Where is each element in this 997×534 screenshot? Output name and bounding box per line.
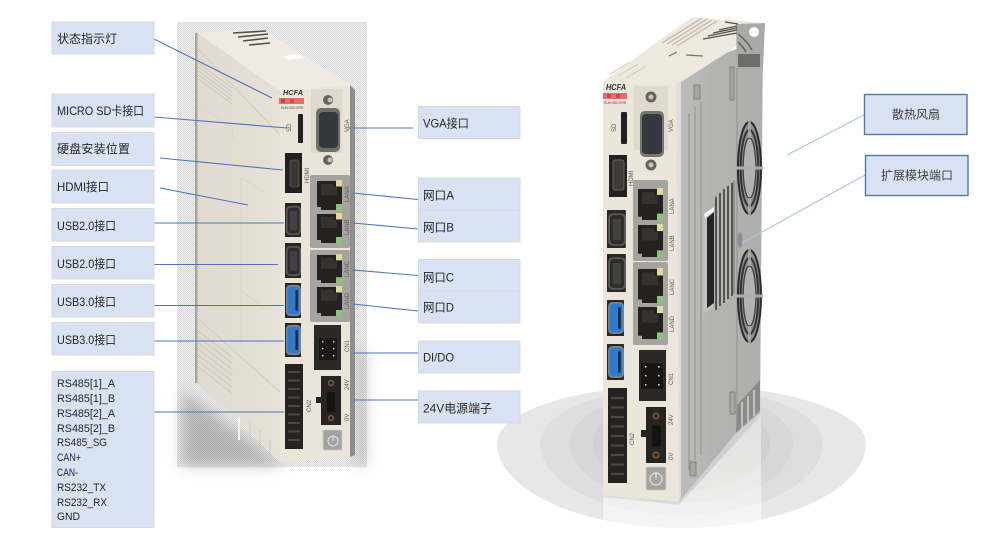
device: right controller photo [603, 17, 765, 502]
label: CN2 signal list: CAN+ [57, 452, 81, 464]
24V power terminal: 0V [345, 414, 351, 421]
LAN A and B: LANB [670, 235, 676, 251]
label: VGA: VGA接口 [423, 116, 469, 130]
SD slot [287, 114, 303, 143]
device: left controller photo [195, 29, 355, 462]
top grille [233, 31, 270, 45]
24V power terminal: 0V [669, 453, 675, 460]
label: CN2 signal list: RS485_SG [57, 437, 107, 449]
label: LAN C: 网口C [423, 270, 454, 284]
USB 3.0 ports [285, 283, 301, 357]
label: expansion port [866, 156, 968, 196]
logo and status LEDs [603, 83, 627, 105]
label: LAN D [418, 291, 520, 323]
label: CN2 signal list: RS485[2]_A [57, 408, 116, 420]
logo and status LEDs: RUN HDD ERR [281, 106, 303, 110]
expansion heat sink [715, 180, 735, 310]
24V power terminal: 24V [669, 414, 675, 425]
side vents [197, 48, 280, 393]
label: drive bay: 硬盘安装位置 [57, 141, 130, 156]
label: DI/DO: DI/DO [423, 350, 454, 364]
SD slot [612, 112, 627, 144]
HDMI port [609, 155, 635, 197]
side panel ridges [689, 68, 737, 470]
USB 2.0 ports [285, 203, 301, 278]
label: CN2 signal list: RS485[1]_A [57, 378, 116, 390]
LAN A and B: LANB [345, 219, 351, 235]
logo and status LEDs: HCFA [606, 83, 626, 92]
VGA port [311, 89, 351, 165]
label: CN2 signal list: GND [57, 511, 80, 523]
CN1 DI/DO terminal [314, 325, 351, 370]
label: VGA [418, 106, 520, 138]
label: CN2 signal list: RS485[2]_B [57, 423, 115, 435]
HDMI port [285, 153, 311, 193]
label: DI/DO [418, 341, 520, 373]
CN1 DI/DO terminal: CN1 [669, 372, 675, 385]
CN2 terminal strip [285, 364, 313, 449]
LAN C and D [633, 262, 676, 345]
label: micro SD [52, 94, 154, 127]
callout leader lines: left [154, 39, 287, 412]
vent fins bottom [736, 380, 760, 433]
label: USB2.0 A: USB2.0接口 [57, 218, 116, 233]
label: LAN D: 网口D [423, 300, 454, 314]
label: LAN A [418, 178, 520, 210]
top grille [703, 22, 738, 39]
label: LAN B [418, 210, 520, 242]
CN1 DI/DO terminal: CN1 [345, 339, 351, 352]
reflective floor shadow: right device [497, 385, 866, 528]
device drop shadow: left device [182, 350, 366, 466]
label: status LEDs: 状态指示灯 [57, 31, 117, 46]
front face [603, 82, 679, 502]
power button [646, 467, 666, 490]
LAN C and D: LANC [670, 278, 676, 295]
label: cooling fan [864, 94, 967, 134]
LAN C and D: LAND [345, 292, 351, 309]
label: micro SD: MICRO SD卡接口 [57, 103, 144, 118]
label: USB3.0 A [52, 284, 154, 317]
24V power terminal [316, 376, 351, 425]
label: status LEDs [52, 22, 154, 54]
CN1 DI/DO terminal [639, 350, 675, 401]
label: CN2 signal list: RS232_TX [57, 482, 107, 494]
logo and status LEDs [279, 88, 304, 110]
side clips [690, 67, 735, 476]
VGA port [634, 86, 675, 170]
VGA port: VGA [345, 119, 351, 132]
fan 1 [736, 120, 763, 216]
LAN C and D [310, 250, 351, 322]
label: CN2 signal list: CAN- [57, 467, 78, 479]
top face [197, 29, 351, 91]
side panel [197, 33, 280, 462]
top vents [662, 18, 717, 46]
label: USB2.0 B: USB2.0接口 [57, 256, 116, 271]
LAN C and D: LAND [670, 315, 676, 332]
label: 24V power terminal [418, 391, 520, 423]
HDMI port: HDMI [305, 167, 311, 183]
LAN A and B [310, 175, 351, 248]
callout leader lines: right device [742, 115, 865, 243]
label: LAN C [418, 260, 520, 291]
label: CN2 signal list [52, 372, 154, 528]
dithered photo background: left device [177, 22, 367, 467]
label: CN2 signal list: RS485[1]_B [57, 393, 115, 405]
label: USB3.0 B: USB3.0接口 [57, 332, 116, 347]
label: drive bay [52, 132, 154, 166]
SD slot: SD [612, 123, 618, 132]
VGA port: VGA [669, 119, 675, 132]
callout leader lines: right of left device [348, 128, 418, 400]
24V power terminal: 24V [345, 379, 351, 390]
24V power terminal [641, 407, 675, 463]
SD slot: SD [287, 123, 293, 132]
label: LAN B: 网口B [423, 220, 454, 234]
CN2 terminal strip: CN2 [307, 399, 313, 412]
label: expansion port: 扩展模块端口 [881, 168, 953, 182]
power button [323, 430, 342, 450]
label: 24V power terminal: 24V电源端子 [423, 402, 492, 416]
LAN C and D: LANC [345, 260, 351, 277]
fan 2 [736, 248, 763, 344]
CN2 terminal strip: CN2 [630, 432, 636, 445]
mounting corner [736, 23, 765, 68]
logo and status LEDs: HCFA [283, 88, 303, 97]
label: USB3.0 B [52, 322, 154, 355]
HDMI port: HDMI [629, 170, 635, 186]
label: USB3.0 A: USB3.0接口 [57, 294, 116, 309]
top face [603, 17, 765, 85]
label: cooling fan: 散热风扇 [892, 106, 940, 122]
LAN A and B: LANA [345, 186, 351, 202]
USB 2.0 ports [607, 210, 626, 292]
right edge strip [350, 85, 355, 457]
screw [738, 232, 742, 248]
front face [280, 85, 350, 462]
logo and status LEDs: RUN HDD ERR [604, 101, 626, 105]
label: HDMI: HDMI接口 [57, 179, 109, 194]
LAN A and B: LANA [670, 198, 676, 214]
floor reflection of device [603, 415, 761, 528]
USB 3.0 ports [607, 300, 624, 380]
label: USB2.0 B [52, 246, 154, 279]
label: CN2 signal list: RS232_RX [57, 497, 108, 509]
label: LAN A: 网口A [423, 188, 454, 202]
expansion slot [703, 207, 714, 314]
label: USB2.0 A [52, 208, 154, 241]
label: HDMI [52, 170, 154, 203]
steel side panel [676, 40, 763, 502]
LAN A and B [633, 180, 676, 261]
CN2 terminal strip [608, 388, 636, 483]
